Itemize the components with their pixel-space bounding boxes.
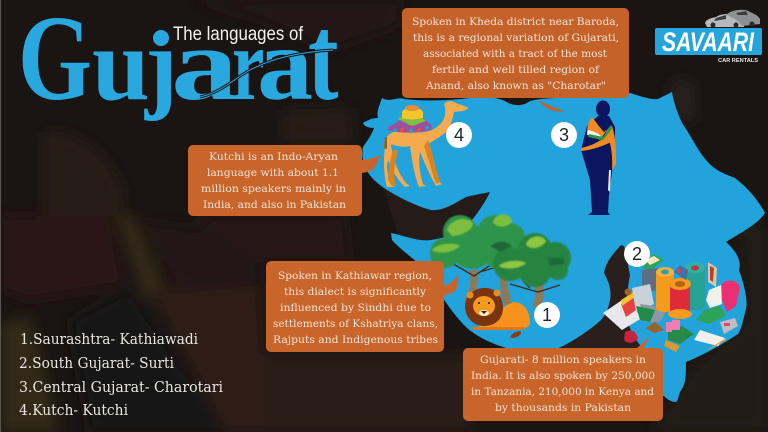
number badge 2: 2 [632,244,642,264]
list of dialects: 2.South Gujarat- Surti [19,356,174,372]
map of Gujarat [362,92,765,402]
title: Gujarat wordmark [22,18,338,121]
callout: Kathiawadi [266,261,458,352]
icon: camel (Kutch) [384,101,468,187]
callout: Charotari: Anand, also known as "Charotar" [425,80,606,92]
callout: Charotari [402,8,629,111]
callout: Gujarati: Gujarati- 8 million speakers in [480,354,646,366]
callout: Gujarati: in Tanzania, 210,000 in Kenya and [471,386,654,398]
callout: Kathiawadi: Rajputs and Indigenous tribes [273,334,438,346]
list of dialects [19,332,223,419]
title: Gujarat wordmark: r [232,8,264,122]
callout: Kathiawadi: this dialect is significantly [284,286,426,298]
callout: Charotari: associated with a tract of the most [423,48,608,60]
callout: Charotari: this is a regional variation of Gujarati, [413,32,619,44]
icon: cars [705,10,760,28]
logo: Savaari car rentals [655,10,762,64]
left edge strip [0,0,1,432]
title: Gujarat wordmark: j [144,6,178,122]
list of dialects: 3.Central Gujarat- Charotari [19,380,223,396]
callout: Kutchi: language with about 1.1 [207,167,339,179]
callout: Gujarati: India. It is also spoken by 250,000 [471,370,655,382]
icon: textile industry isometric [603,254,740,352]
number badge 4 [446,122,472,148]
callout: Charotari: fertile and well tilled region of [432,64,600,76]
callout: Kathiawadi: influenced by Sindhi due to [280,302,431,314]
logo: Savaari car rentals: CAR RENTALS [718,58,758,64]
number badge 3 [551,122,577,148]
callout: Charotari: Spoken in Kheda district near Baroda, [412,16,619,28]
callout: Kathiawadi: Spoken in Kathiawar region, [278,270,432,282]
icon: lion [465,288,530,338]
callout: Kathiawadi: settlements of Kshatriya clans, [273,318,438,330]
icon: woman silhouette with tricolour sash [581,100,616,215]
title: Gujarat wordmark: a [171,6,238,121]
callout: Kutchi: million speakers mainly in [201,183,346,195]
icon: trees [430,214,571,308]
callout: Gujarati: by thousands in Pakistan [495,402,631,414]
number badge 1: 1 [542,305,552,325]
subtitle: The languages of [173,24,304,45]
list of dialects: 1.Saurashtra- Kathiawadi [20,332,198,348]
title: Gujarat wordmark: u [92,8,150,122]
title: Gujarat wordmark: a [257,8,313,122]
callout: Gujarati [463,336,663,421]
number badge 2 [624,241,650,267]
callout: Kutchi [188,145,380,216]
number badge 3: 3 [559,125,569,145]
list of dialects: 4.Kutch- Kutchi [19,403,128,419]
callout: Kutchi: Kutchi is an Indo-Aryan [209,151,338,163]
callout: Kutchi: India, and also in Pakistan [203,199,346,211]
number badge 1 [534,302,560,328]
number badge 4: 4 [454,125,464,145]
